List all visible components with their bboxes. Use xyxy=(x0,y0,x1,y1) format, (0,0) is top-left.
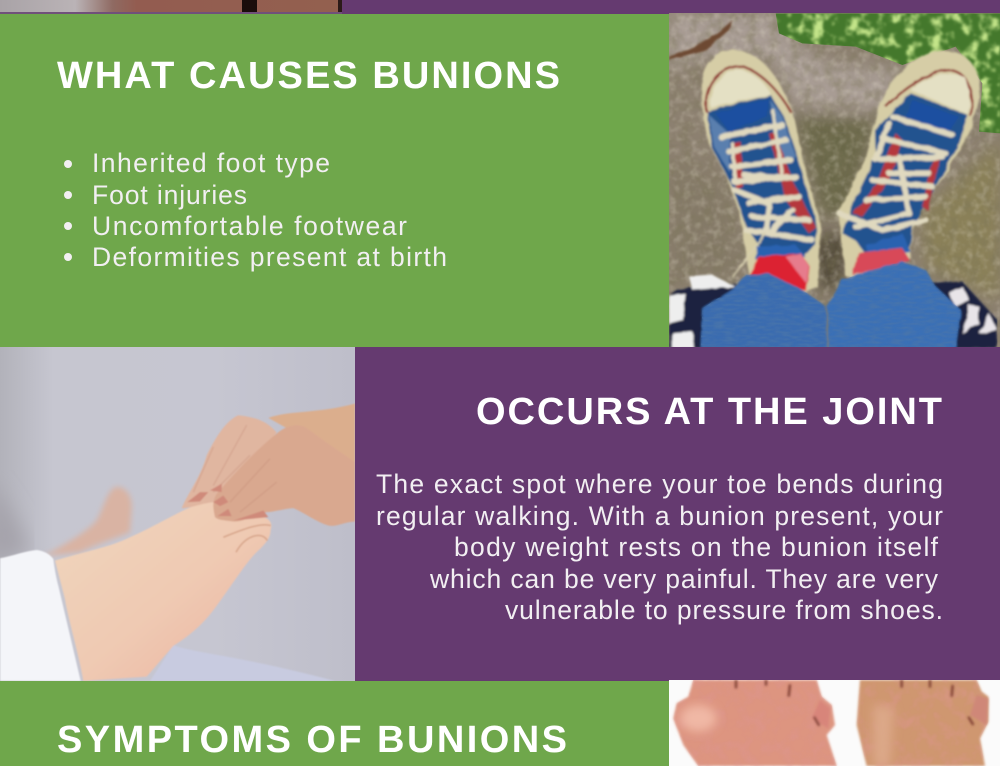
heading: occurs at the joint: OCCURS AT THE JOINT xyxy=(476,391,942,433)
photo: bunion feet xyxy=(669,680,1000,766)
panel: occurs at the joint xyxy=(355,347,1000,681)
striped cloth xyxy=(669,283,749,348)
bullet list: causes xyxy=(64,148,447,272)
left shoe xyxy=(702,50,821,292)
heading: what causes bunions: WHAT CAUSES BUNIONS xyxy=(57,55,560,97)
paragraph: joint description: body weight rests on the bunion itself xyxy=(454,532,939,562)
paragraph: joint description: The exact spot where your toe bends during xyxy=(376,469,943,499)
bullet list: causes: Inherited foot type xyxy=(92,148,330,178)
bullet list: causes: Uncomfortable footwear xyxy=(92,211,407,241)
top purple strip xyxy=(342,0,1000,14)
bullet list: causes: Deformities present at birth xyxy=(92,242,447,272)
hand back xyxy=(182,415,277,508)
photo: sneakers on rock xyxy=(669,13,1000,347)
hand front xyxy=(213,425,355,526)
bullet list: causes: Foot injuries xyxy=(92,180,247,210)
arm xyxy=(268,404,355,465)
right shoe xyxy=(838,50,980,277)
panel: symptoms of bunions xyxy=(0,681,669,766)
paragraph: joint description: vulnerable to pressure from shoes. xyxy=(505,595,943,625)
paragraph: joint description: which can be very painful. They are very xyxy=(429,564,939,594)
sleeve xyxy=(0,550,81,681)
panel: what causes bunions xyxy=(0,14,669,347)
main foot xyxy=(55,499,271,681)
top photo strip xyxy=(0,0,342,14)
heading: symptoms of bunions: SYMPTOMS OF BUNIONS xyxy=(57,719,567,761)
paragraph: joint description: regular walking. With a bunion present, your xyxy=(376,501,943,531)
paragraph: joint description xyxy=(376,469,943,625)
jeans xyxy=(701,273,827,348)
towel xyxy=(150,645,335,681)
photo: foot being examined xyxy=(0,347,355,681)
